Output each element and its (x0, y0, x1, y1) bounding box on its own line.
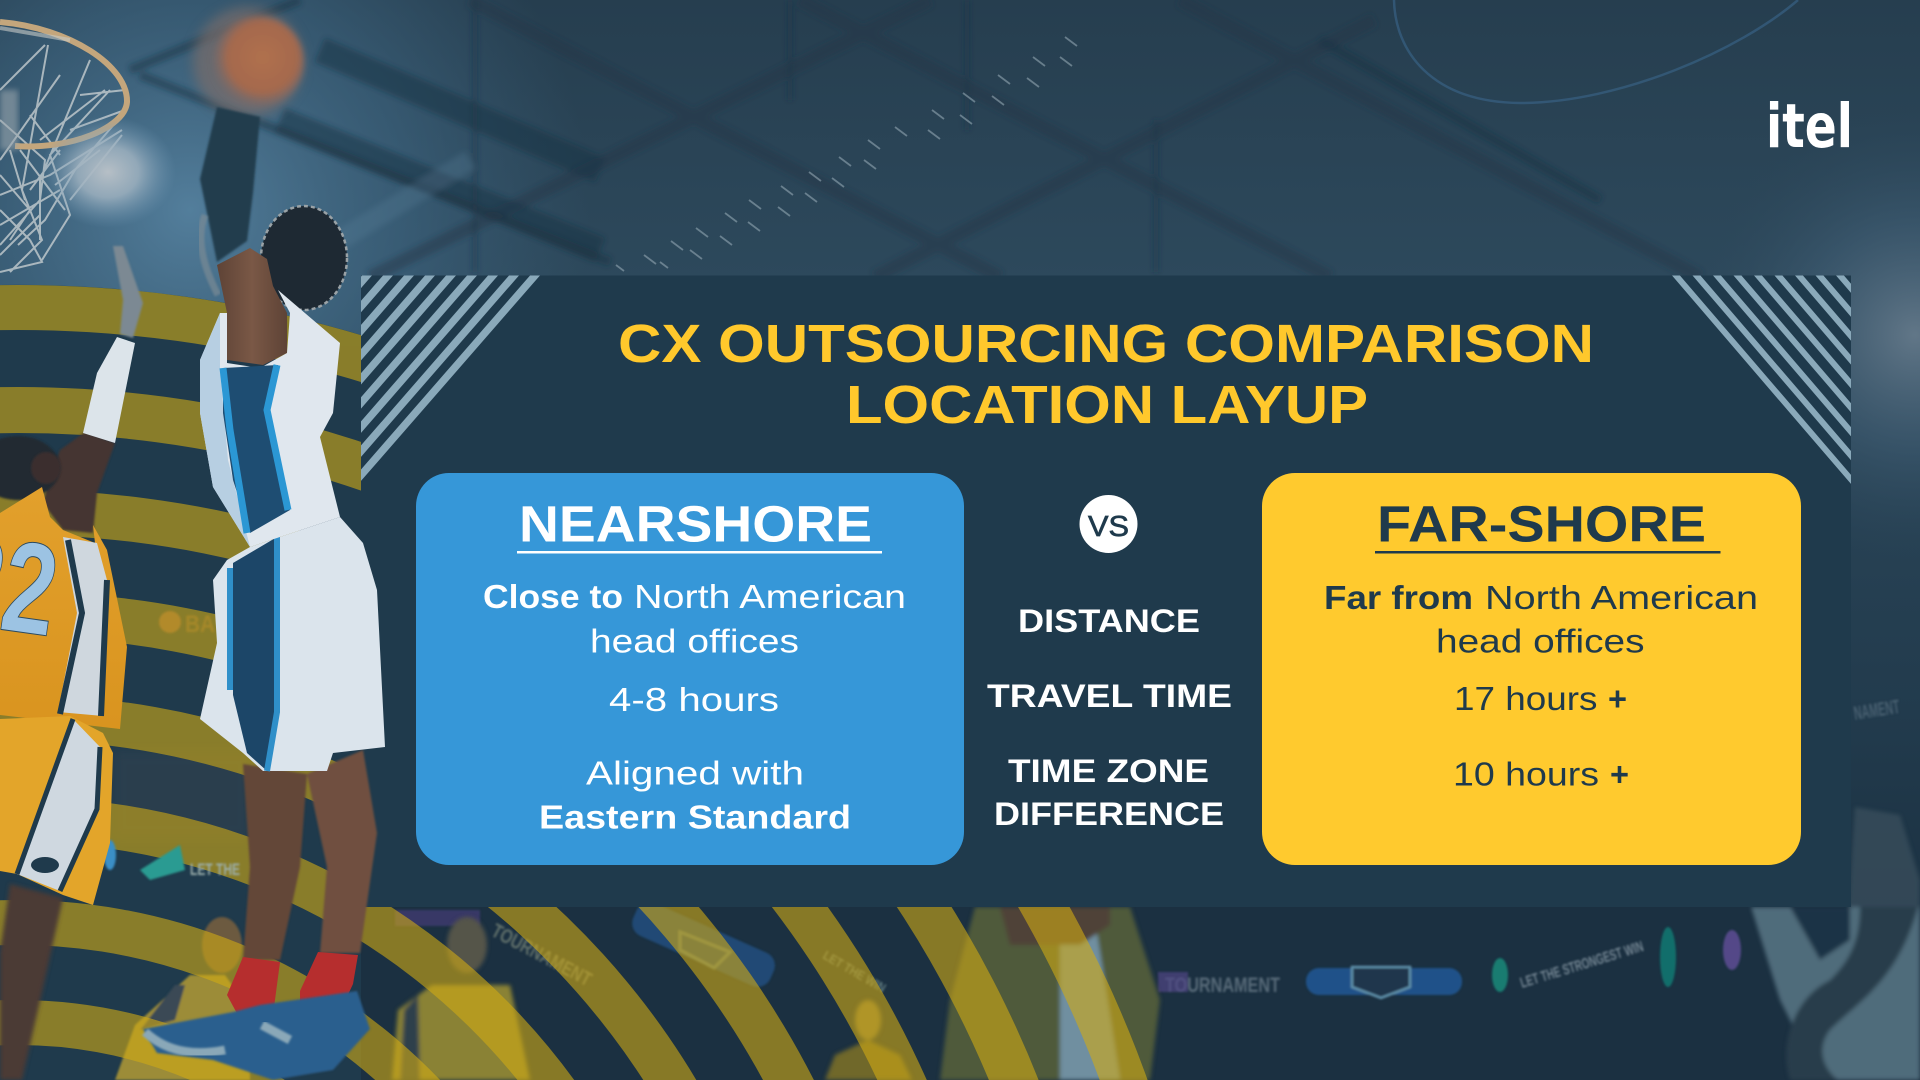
ball halo (193, 7, 303, 117)
banner right: TOURNAMENT (1165, 974, 1280, 997)
card: nearshore (416, 473, 964, 865)
hair (261, 206, 347, 310)
nearshore card background (416, 473, 964, 865)
far-shore travel time (1454, 680, 1627, 717)
main player in white (143, 7, 385, 1080)
shorts blue edges (230, 537, 277, 771)
arena teal banner left: LET THE (190, 860, 240, 879)
basketball hoop (0, 22, 127, 272)
crowd stand behind players (112, 750, 252, 840)
plus: + (1608, 680, 1627, 717)
arena banners (395, 697, 1901, 998)
defender face (31, 452, 61, 484)
vs text: VS (1088, 511, 1129, 543)
shorts logo (31, 857, 59, 873)
title line one: CX OUTSOURCING COMPARISON (618, 314, 1594, 374)
far-shore heading: FAR-SHORE (1377, 496, 1706, 552)
head offices: head offices (590, 622, 799, 660)
far leg (307, 750, 377, 953)
dark disc behind the arcs (0, 285, 1148, 1080)
jersey (200, 290, 340, 547)
seventeen hours: 17 hours (1454, 680, 1598, 717)
net (0, 45, 125, 272)
shoe sole (145, 1025, 290, 1053)
label: time zone: TIME ZONE (1008, 753, 1209, 789)
near leg (243, 764, 307, 960)
jersey stripe edges (60, 540, 107, 716)
court circle on the ceiling (1394, 0, 1798, 103)
far from: Far from (1324, 579, 1473, 616)
far-shore underline (1375, 551, 1720, 554)
raised arm (200, 107, 260, 262)
shorts dark stripe (233, 537, 277, 771)
far-shore card background (1262, 473, 1801, 865)
nearshore time zone (539, 754, 851, 836)
card: far-shore (1262, 473, 1801, 865)
socks (227, 952, 358, 1019)
defender head (0, 436, 60, 500)
left player in yellow (0, 246, 143, 1080)
near sock (227, 957, 280, 1019)
far-shore distance (1324, 579, 1758, 660)
nearshore travel time: 4-8 hours (609, 681, 779, 718)
logo: itel: itel (1766, 91, 1853, 162)
arena teal banner left: BA (185, 611, 215, 638)
ball body (212, 16, 304, 108)
banner right (1158, 697, 1901, 998)
defender jersey (0, 487, 127, 729)
title (618, 314, 1594, 435)
left light glow (0, 0, 600, 610)
close to: Close to (483, 578, 623, 615)
neck and shoulder (217, 248, 287, 365)
background player: yellow jersey near centre-left (392, 917, 530, 1080)
head offices: head offices (1436, 622, 1644, 660)
label: difference: DIFFERENCE (994, 796, 1224, 832)
defender wrist band (83, 337, 135, 443)
rim (0, 22, 127, 146)
yellow concentric arcs (0, 285, 1148, 1080)
north american: North American (1485, 579, 1758, 616)
defender shorts (0, 716, 113, 905)
vs badge (1080, 495, 1138, 553)
shorts stripe (17, 719, 100, 891)
bright light by the hoop (40, 116, 176, 228)
aligned with: Aligned with (586, 754, 804, 792)
jersey side stripe (58, 537, 107, 716)
background player right (1751, 807, 1920, 1080)
plus: + (1610, 756, 1629, 792)
ceiling beams (130, 0, 1700, 277)
nearshore underline (517, 551, 882, 554)
main panel (355, 266, 1857, 907)
defender hand (113, 246, 143, 338)
label: distance: DISTANCE (1018, 603, 1200, 639)
jersey left shading (200, 313, 250, 547)
panel background (361, 276, 1851, 907)
nearshore distance (483, 578, 906, 660)
shorts (200, 517, 385, 771)
arm motion blur (201, 215, 218, 295)
truss with light ticks (616, 37, 1077, 271)
bright light left edge (0, 90, 18, 150)
arena teal banner left (104, 611, 240, 880)
jersey centre stripe (223, 365, 290, 533)
row labels (987, 603, 1232, 832)
banner right: LET THE STRONGEST WIN (1518, 938, 1646, 992)
stripes: top right (1672, 276, 1851, 484)
legs (243, 750, 377, 960)
north american: North American (634, 578, 906, 615)
background player: yellow jersey left (115, 917, 250, 1080)
banner left (395, 897, 889, 996)
banner left: LET THE WIN (820, 948, 889, 996)
vs circle (1080, 495, 1138, 553)
background player: centre with towel (940, 907, 1160, 1080)
far sock (300, 952, 358, 1012)
defender leg (0, 884, 63, 1080)
title line two: LOCATION LAYUP (846, 375, 1368, 435)
banner left: TOURNAMENT (488, 920, 595, 991)
crowd and board strip lower right (361, 907, 1920, 1080)
background player: far seated (825, 1000, 912, 1080)
basketball (193, 7, 304, 117)
defender forearm (43, 432, 115, 533)
stripes: top left (361, 276, 540, 481)
far-shore time zone (1453, 756, 1629, 792)
right light glow (1685, 105, 1920, 565)
shorts stripe edges (17, 719, 100, 891)
eastern standard: Eastern Standard (539, 798, 851, 836)
nearshore heading: NEARSHORE (519, 496, 872, 552)
ten hours: 10 hours (1453, 756, 1599, 792)
jersey blue edges (223, 365, 288, 533)
shoes (143, 991, 370, 1080)
label: travel time: TRAVEL TIME (987, 678, 1232, 714)
